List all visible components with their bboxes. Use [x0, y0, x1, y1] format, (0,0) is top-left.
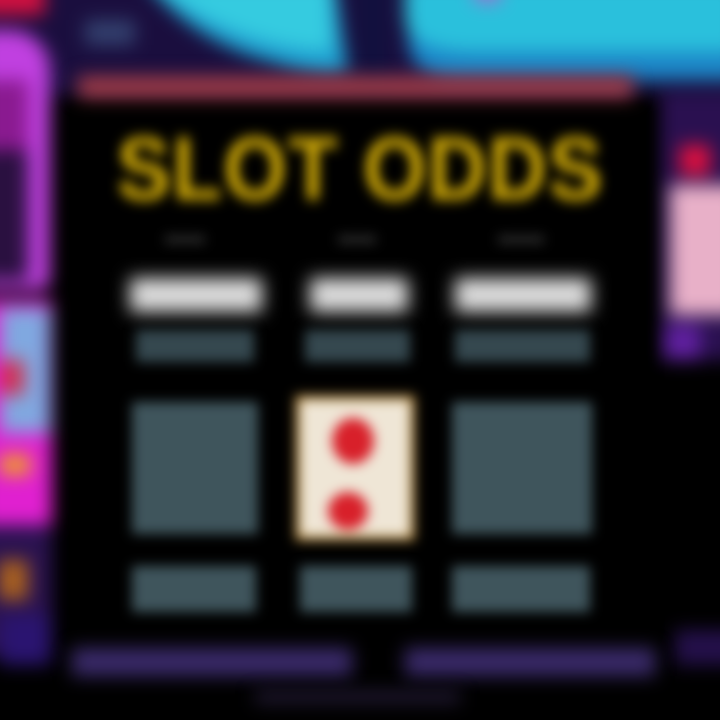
title: SLOT ODDS: [116, 119, 604, 220]
card center: hearts: [300, 400, 410, 536]
icon: upper heart: [332, 418, 374, 464]
column 2 label: [305, 330, 410, 362]
left cyan light swoosh: [144, 0, 720, 94]
column 1 heading: [165, 236, 205, 243]
column 2 heading: [338, 236, 376, 243]
icon: lower heart: [328, 492, 368, 530]
column 1 label: [136, 330, 254, 362]
footer cell left: [132, 566, 256, 612]
card right: [452, 402, 592, 534]
footer cell center: [300, 566, 412, 612]
footer bar left: [72, 648, 352, 676]
footnote: [255, 692, 460, 702]
column 3 heading: [498, 236, 544, 243]
column 3 label: [455, 330, 590, 362]
card left: [132, 402, 258, 534]
column 1 value: [130, 278, 262, 312]
column 3 value: [455, 278, 591, 312]
main black panel: [72, 104, 650, 634]
column 2 value: [310, 278, 408, 312]
footer bar right: [405, 648, 655, 676]
top red bar: [78, 76, 633, 98]
footer cell right: [452, 566, 590, 612]
